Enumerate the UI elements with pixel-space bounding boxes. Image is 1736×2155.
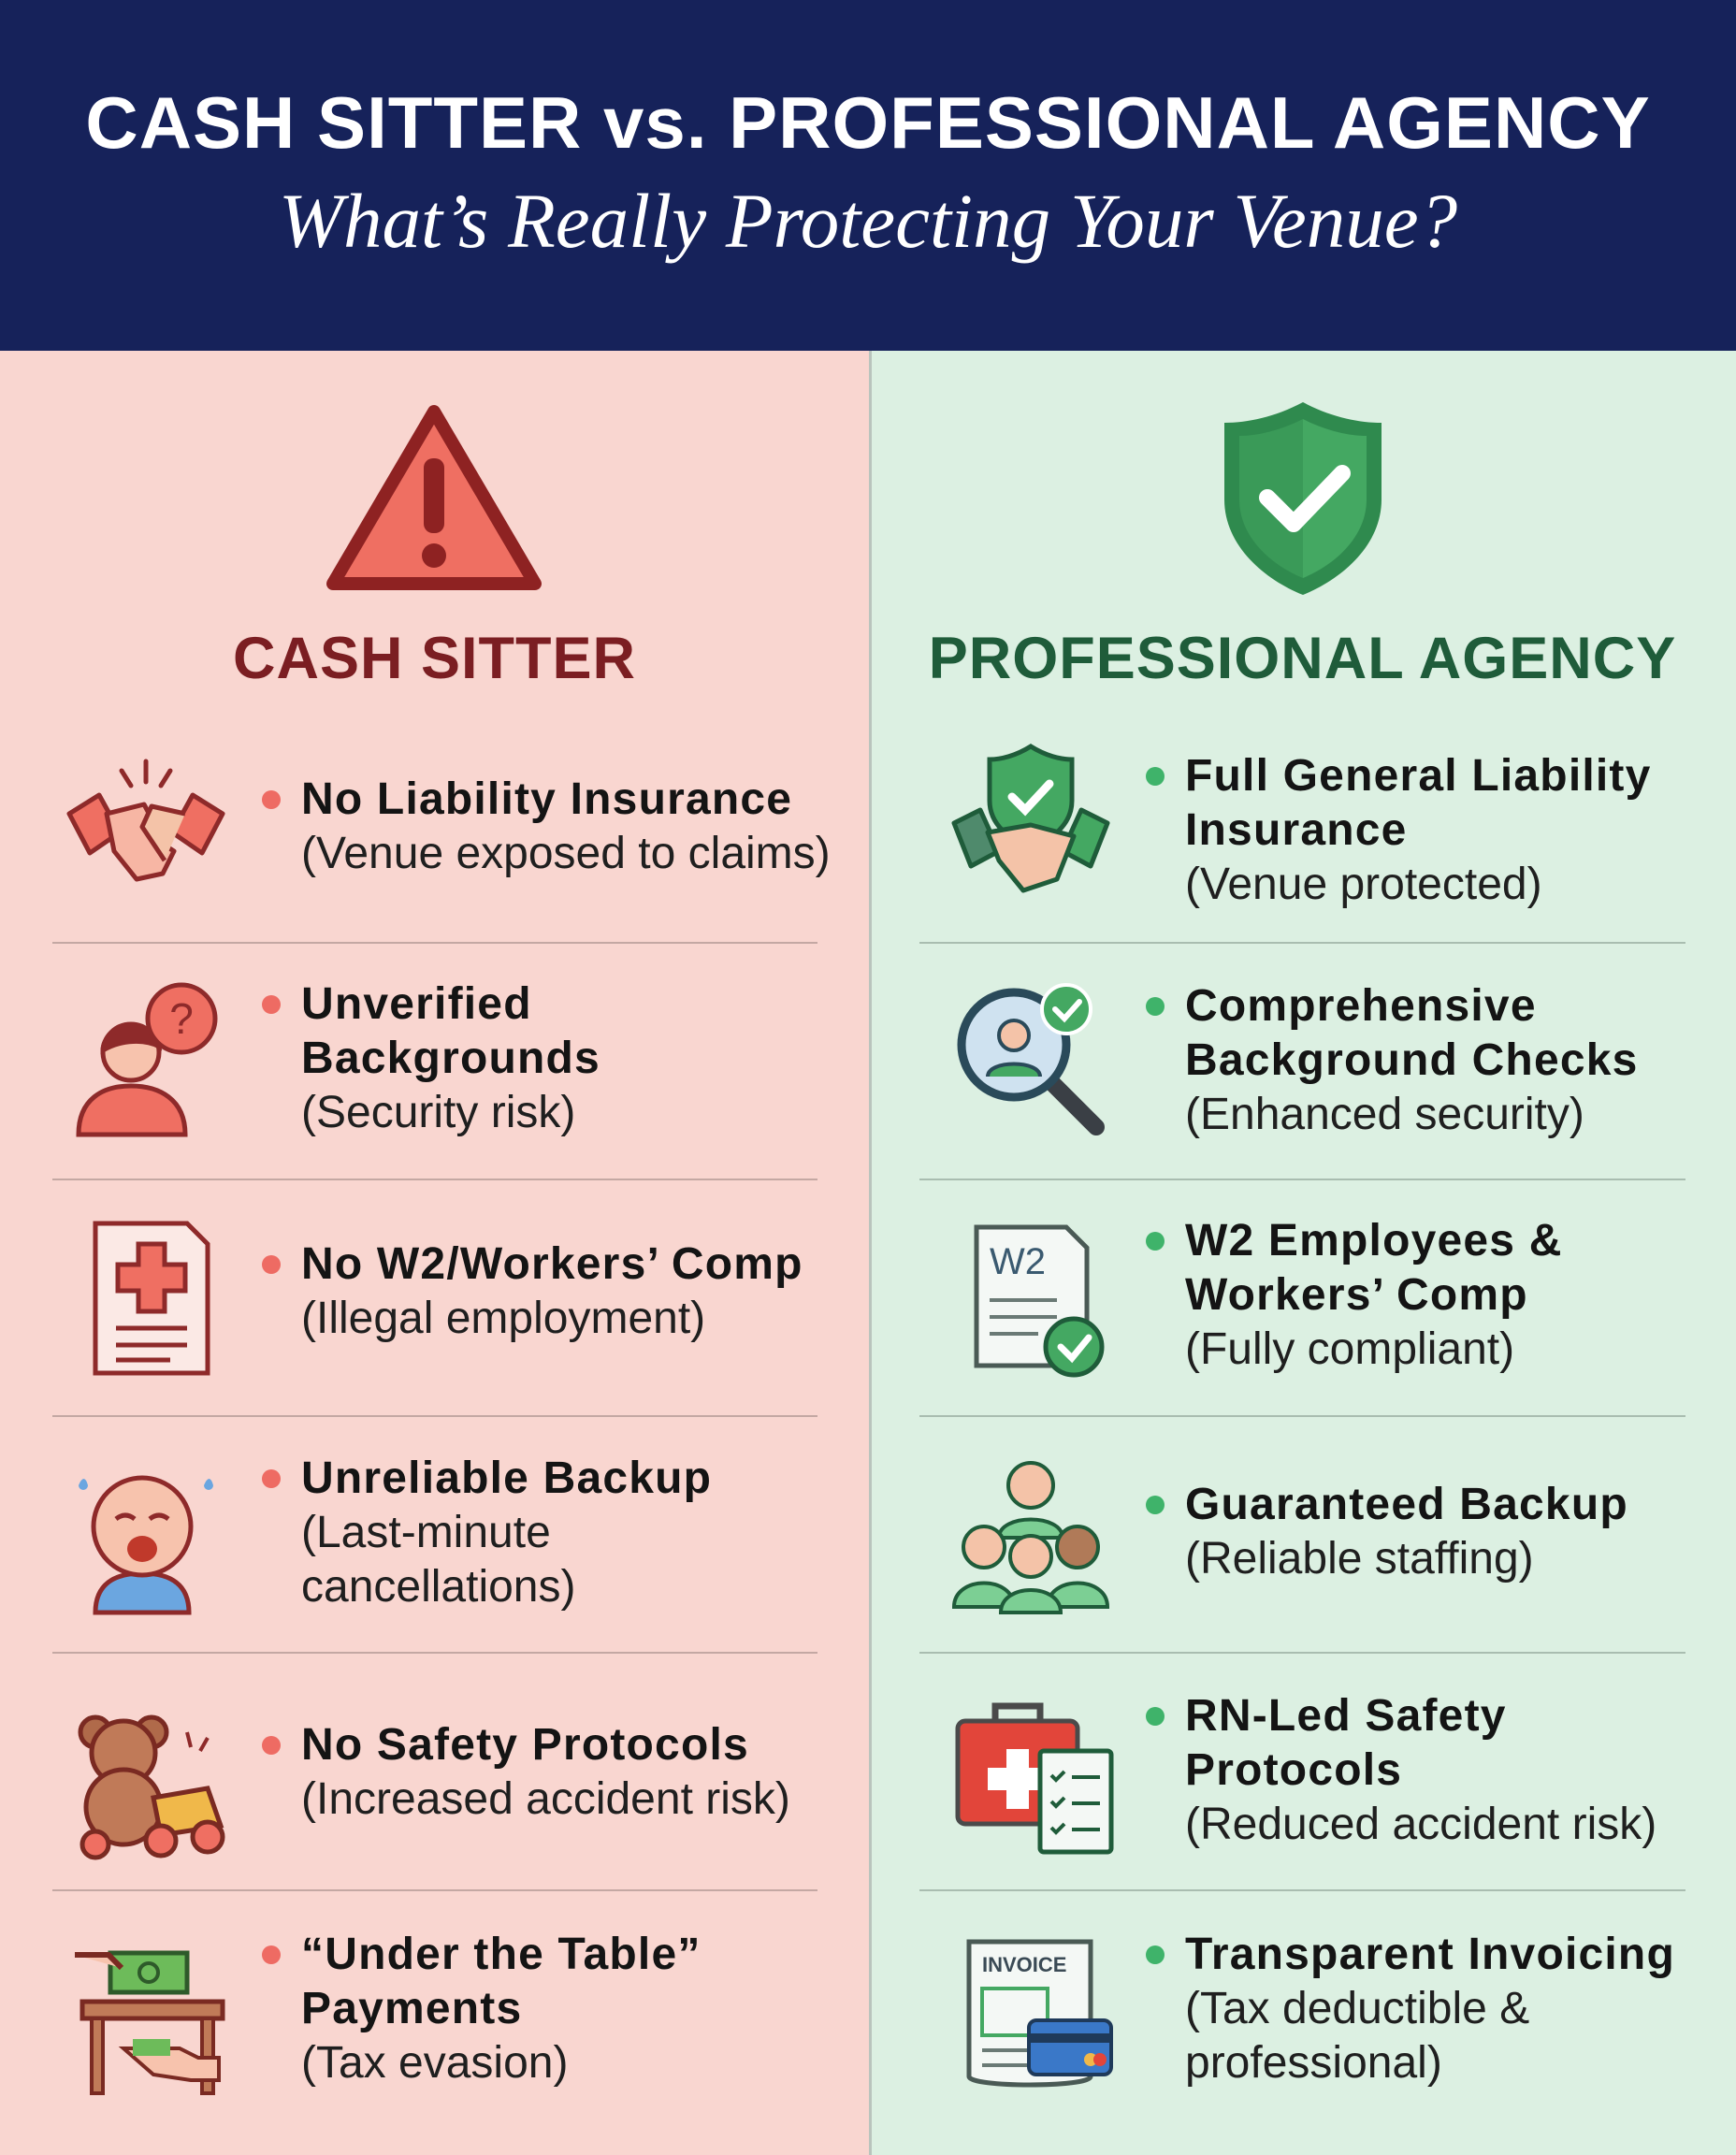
item: unreliable backup: Unreliable Backup [301,1454,712,1503]
heading: cash sitter: CASH SITTER [233,626,636,691]
icon: team [952,1461,1109,1614]
item: unverified backgrounds: Unverified [301,979,532,1029]
item: transparent invoicing: Transparent Invoicing [1185,1930,1675,1979]
item: no liability insurance: No Liability Insurance [301,774,792,824]
item: unreliable backup [262,1454,712,1612]
item: transparent invoicing: professional) [1185,2038,1442,2088]
item: full general liability [1146,751,1652,909]
item: rn-led safety: (Reduced accident risk) [1185,1800,1656,1849]
icon: under the table cash [75,1951,224,2095]
icon: magnifier check [958,983,1105,1135]
item: rn-led safety: RN-Led Safety [1185,1691,1507,1741]
item: unreliable backup: cancellations) [301,1562,575,1612]
item: guaranteed backup: Guaranteed Backup [1185,1480,1628,1529]
icon: first aid kit clipboard [956,1702,1113,1854]
icon: warning triangle [326,405,542,590]
icon: medical document [94,1222,210,1375]
item: rn-led safety: Protocols [1185,1745,1402,1795]
item: full general liability: Insurance [1185,805,1408,855]
item: w2 employees: Workers’ Comp [1185,1270,1528,1320]
icon: person question [77,982,217,1137]
panel: cash sitter [0,351,869,2155]
item: w2 employees: W2 Employees & [1185,1216,1563,1266]
item: rn-led safety [1146,1691,1656,1849]
item: no safety protocols [262,1720,790,1824]
item: background checks: (Enhanced security) [1185,1090,1584,1139]
item: no w2: No W2/Workers’ Comp [301,1239,803,1289]
icon: broken toys [79,1715,224,1859]
item: no safety protocols: No Safety Protocols [301,1720,749,1770]
heading: professional agency: PROFESSIONAL AGENCY [929,626,1676,691]
icon: person question: ? [169,994,194,1043]
item: full general liability: Full General Liability [1185,751,1652,801]
item: full general liability: (Venue protected) [1185,860,1542,909]
item: no liability insurance: (Venue exposed to claims) [301,829,831,878]
item: unreliable backup: (Last-minute [301,1508,551,1557]
item: guaranteed backup [1146,1480,1628,1584]
item: transparent invoicing [1146,1930,1675,2088]
item: transparent invoicing: (Tax deductible & [1185,1984,1529,2033]
item: unverified backgrounds: Backgrounds [301,1034,600,1083]
icon: invoice card: INVOICE [982,1953,1066,1976]
header banner [0,0,1736,351]
icon: shield handshake [951,744,1110,892]
icon: crying baby [79,1476,213,1614]
item: unverified backgrounds: (Security risk) [301,1088,575,1137]
icon: w2 document [975,1225,1104,1377]
item: under the table payments: “Under the Table” [301,1930,702,1979]
item: no safety protocols: (Increased accident risk) [301,1774,790,1824]
item: no w2 [262,1239,803,1343]
item: under the table payments: (Tax evasion) [301,2038,568,2088]
item: under the table payments [262,1930,702,2088]
title: CASH SITTER vs. PROFESSIONAL AGENCY [85,81,1651,164]
item: background checks: Comprehensive [1185,981,1537,1031]
subtitle: What’s Really Protecting Your Venue? [279,178,1457,264]
panel: professional agency [869,351,1736,2155]
icon: shield check [1224,402,1382,595]
icon: invoice card [967,1940,1113,2088]
item: no liability insurance [262,774,831,878]
item: w2 employees: (Fully compliant) [1185,1324,1514,1374]
icon: w2 document: W2 [990,1241,1046,1282]
item: w2 employees [1146,1216,1563,1374]
item: guaranteed backup: (Reliable staffing) [1185,1534,1534,1584]
item: background checks: Background Checks [1185,1035,1639,1085]
item: no w2: (Illegal employment) [301,1294,705,1343]
item: background checks [1146,981,1639,1139]
item: under the table payments: Payments [301,1984,522,2033]
icon: broken handshake [66,759,225,881]
item: unverified backgrounds [262,979,600,1137]
